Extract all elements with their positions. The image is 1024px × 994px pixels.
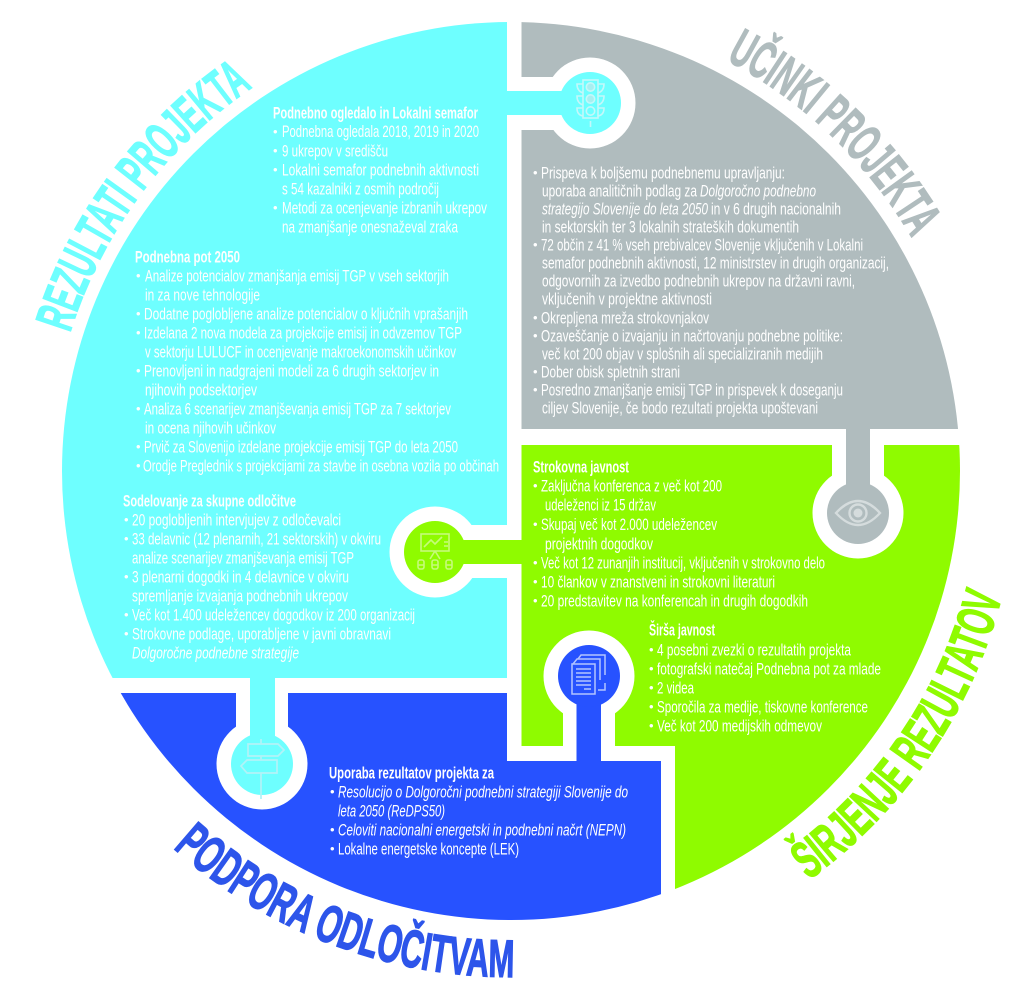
- text block: Širša javnost: Sporočila za medije, tiskovne konference: [657, 698, 868, 716]
- connector: traffic light badge: [507, 58, 636, 148]
- text block: Strokovna javnost: Skupaj več kot 2.000 udeležencev: [541, 515, 717, 534]
- text block: Podnebna pot 2050: v sektorju LULUCF in ocenjevanje makroekonomskih učinkov: [145, 342, 456, 362]
- icon: eye: [836, 501, 880, 525]
- icon: stacked documents: [572, 655, 605, 694]
- text block: učinki projekta list: 72 občin z 41 % vseh prebivalcev Slovenije vključenih v Lokalni: [541, 236, 863, 254]
- text block: učinki projekta list: in sektorskih ter 3 lokalnih strateških dokumentih: [542, 218, 799, 236]
- text block: Širša javnost: •: [649, 718, 654, 733]
- text block: Podnebna pot 2050: njihovih podsektorjev: [145, 380, 257, 400]
- panel: širjenje rezultatov (green quadrant): [522, 445, 964, 924]
- text block: Podnebna pot 2050: [135, 248, 499, 476]
- text block: Sodelovanje za skupne odločitve: Več kot 1.400 udeležencev dogodkov iz 200 organizacij: [132, 606, 415, 624]
- text block: Sodelovanje za skupne odločitve: •: [124, 569, 129, 584]
- text block: Podnebno ogledalo in Lokalni semafor: •: [273, 162, 278, 177]
- text block: Strokovna javnost: Strokovna javnost: [533, 458, 629, 476]
- text block: Sodelovanje za skupne odločitve: •: [124, 626, 129, 641]
- connector: presentation badge: [390, 506, 522, 598]
- text block: učinki projekta list: uporaba analitičnih podlag za: [542, 182, 697, 200]
- text block: Uporaba rezultatov projekta: Uporaba rezultatov projekta za: [329, 764, 494, 782]
- text block: Podnebna pot 2050: •: [136, 439, 141, 454]
- text block: Podnebno ogledalo in Lokalni semafor: s 54 kazalniki z osmih področij: [282, 180, 439, 198]
- text block: Podnebna pot 2050: Prvič za Slovenijo izdelane projekcije emisij TGP do leta 2050: [144, 438, 458, 456]
- text block: učinki projekta list: •: [533, 382, 538, 397]
- text block: učinki projekta list: odgovornih za izvedbo podnebnih ukrepov na državni ravni,: [542, 272, 855, 290]
- text block: učinki projekta list: •: [533, 310, 538, 325]
- text block: Sodelovanje za skupne odločitve: [123, 492, 415, 662]
- text block: Sodelovanje za skupne odločitve: analize scenarijev zmanjševanja emisij TGP: [132, 548, 354, 568]
- text block: Sodelovanje za skupne odločitve: Strokovne podlage, uporabljene v javni obravnavi: [132, 624, 391, 644]
- text block: učinki projekta list: več kot 200 objav v splošnih ali specializiranih medijih: [542, 344, 823, 364]
- text block: Sodelovanje za skupne odločitve: Sodelovanje za skupne odločitve: [123, 492, 296, 510]
- text block: učinki projekta list: strategijo Slovenije do leta 2050: [542, 200, 708, 218]
- text block: Podnebna pot 2050: in za nove tehnologije: [145, 286, 260, 304]
- text block: Podnebna pot 2050: •: [136, 458, 141, 473]
- text block: Podnebno ogledalo in Lokalni semafor: Lokalni semafor podnebnih aktivnosti: [282, 160, 479, 180]
- text block: učinki projekta list: vključenih v projektne aktivnosti: [542, 290, 712, 308]
- text block: Uporaba rezultatov projekta: •: [330, 784, 335, 799]
- panel: podpora odločitvam (blue quadrant): [120, 693, 661, 920]
- text block: Strokovna javnost: •: [533, 478, 538, 493]
- text block: Širša javnost: [649, 620, 881, 736]
- text block: Podnebna pot 2050: •: [136, 325, 141, 340]
- text block: učinki projekta list: Ozaveščanje o izvajanju in načrtovanju podnebne politike:: [541, 326, 843, 346]
- text block: Podnebna pot 2050: Prenovljeni in nadgrajeni modeli za 6 drugih sektorjev in: [144, 362, 439, 380]
- text block: učinki projekta list: •: [533, 328, 538, 343]
- text block: Strokovna javnost: •: [533, 516, 538, 532]
- text block: Uporaba rezultatov projekta: •: [330, 841, 335, 856]
- text block: Podnebna pot 2050: Dodatne poglobljene analize potencialov o ključnih vprašanjih: [144, 304, 468, 324]
- text block: učinki projekta list: in v 6 drugih nacionalnih: [711, 200, 841, 218]
- connector: documents badge: [544, 630, 634, 761]
- panel: rezultati projekta (cyan quadrant): [60, 20, 507, 678]
- text block: Podnebno ogledalo in Lokalni semafor: •: [273, 143, 278, 158]
- title: Rezultati projekta: REZULTATI PROJEKTA: [35, 61, 253, 332]
- icon: presentation board with audience: [418, 534, 452, 569]
- text block: učinki projekta list: semafor podnebnih aktivnosti, 12 ministrstev in drugih organizacij,: [542, 254, 889, 272]
- text block: Strokovna javnost: 10 člankov v znanstveni in strokovni literaturi: [541, 572, 775, 592]
- text block: Podnebna pot 2050: Izdelana 2 nova modela za projekcije emisij in odvzemov TGP: [144, 324, 462, 342]
- text block: Strokovna javnost: 20 predstavitev na konferencah in drugih dogodkih: [541, 592, 808, 610]
- connector: signpost badge: [216, 678, 308, 810]
- connector: eye badge: [812, 429, 904, 558]
- text block: Uporaba rezultatov projekta: Celoviti nacionalni energetski in podnebni načrt (NEPN): [338, 820, 626, 840]
- text block: Širša javnost: •: [649, 642, 654, 657]
- text block: učinki projekta list: •: [533, 237, 538, 252]
- text block: Sodelovanje za skupne odločitve: Dolgoročne podnebne strategije: [132, 644, 299, 662]
- text block: Širša javnost: Širša javnost: [649, 620, 715, 640]
- text block: Strokovna javnost: •: [533, 574, 538, 589]
- title: Podpora odločitvam: PODPORA ODLOČITVAM: [174, 821, 514, 978]
- text block: Uporaba rezultatov projekta: leta 2050 (ReDPS50): [338, 802, 445, 820]
- text block: Uporaba rezultatov projekta: [329, 764, 628, 858]
- text block: Uporaba rezultatov projekta: Resolucijo o Dolgoročni podnebni strategiji Slovenije do: [338, 782, 628, 802]
- text block: Podnebna pot 2050: •: [136, 363, 141, 378]
- icon: signpost: [241, 739, 284, 799]
- icon: traffic light: [577, 80, 604, 127]
- text block: Podnebno ogledalo in Lokalni semafor: •: [273, 124, 278, 139]
- text block: Podnebno ogledalo in Lokalni semafor: Podnebno ogledalo in Lokalni semafor: [273, 104, 478, 122]
- text block: Širša javnost: •: [649, 661, 654, 676]
- text block: učinki projekta list: Dolgoročno podnebno: [700, 182, 816, 200]
- text block: Podnebna pot 2050: Orodje Preglednik s projekcijami za stavbe in osebna vozila po občinah: [143, 456, 499, 476]
- text block: Podnebno ogledalo in Lokalni semafor: Podnebna ogledala 2018, 2019 in 2020: [282, 122, 479, 141]
- text block: učinki projekta list: ciljev Slovenije, če bodo rezultati projekta upoštevani: [542, 398, 818, 418]
- text block: Sodelovanje za skupne odločitve: •: [124, 607, 129, 622]
- text block: Podnebno ogledalo in Lokalni semafor: [273, 104, 487, 236]
- text block: Podnebna pot 2050: •: [136, 306, 141, 321]
- text block: Podnebno ogledalo in Lokalni semafor: 9 ukrepov v središču: [282, 142, 388, 160]
- text block: Podnebno ogledalo in Lokalni semafor: Metodi za ocenjevanje izbranih ukrepov: [282, 198, 487, 218]
- text block: Podnebna pot 2050: Analiza 6 scenarijev zmanjševanja emisij TGP za 7 sektorjev: [144, 400, 451, 418]
- text block: Strokovna javnost: projektnih dogodkov: [545, 534, 653, 554]
- title: Učinki projekta: UČINKI PROJEKTA: [730, 28, 940, 238]
- text block: Sodelovanje za skupne odločitve: 3 plenarni dogodki in 4 delavnice v okviru: [132, 568, 349, 586]
- text block: Sodelovanje za skupne odločitve: 20 poglobljenih intervjujev z odločevalci: [132, 510, 341, 530]
- text block: Podnebno ogledalo in Lokalni semafor: •: [273, 200, 278, 215]
- text block: učinki projekta list: Prispeva k boljšemu podnebnemu upravljanju:: [541, 164, 785, 182]
- panel: učinki projekta (grey quadrant): [522, 20, 964, 429]
- text block: učinki projekta list: Okrepljena mreža strokovnjakov: [541, 308, 709, 328]
- text block: Širša javnost: •: [649, 699, 654, 714]
- text block: Strokovna javnost: •: [533, 593, 538, 608]
- text block: Sodelovanje za skupne odločitve: •: [124, 531, 129, 546]
- text block: Širša javnost: 2 videa: [657, 678, 694, 698]
- text block: Podnebna pot 2050: Podnebna pot 2050: [135, 248, 240, 266]
- text block: Podnebna pot 2050: •: [136, 268, 141, 283]
- text block: Podnebna pot 2050: in ocena njihovih učinkov: [145, 418, 276, 438]
- text block: Širša javnost: •: [649, 680, 654, 695]
- text block: učinki projekta list: [533, 164, 889, 418]
- text block: Širša javnost: fotografski natečaj Podnebna pot za mlade: [657, 660, 881, 678]
- text block: Strokovna javnost: udeleženci iz 15 držav: [545, 496, 656, 514]
- text block: Sodelovanje za skupne odločitve: •: [124, 512, 129, 527]
- text block: Sodelovanje za skupne odločitve: 33 delavnic (12 plenarnih, 21 sektorskih) v okviru: [132, 530, 381, 548]
- text block: Strokovna javnost: [533, 458, 825, 610]
- text block: učinki projekta list: •: [533, 165, 538, 180]
- text block: Širša javnost: 4 posebni zvezki o rezultatih projekta: [657, 640, 851, 660]
- text block: učinki projekta list: Dober obisk spletnih strani: [541, 362, 680, 382]
- text block: Strokovna javnost: Zaključna konferenca z več kot 200: [541, 476, 722, 496]
- text block: Uporaba rezultatov projekta: •: [330, 822, 335, 837]
- text block: Uporaba rezultatov projekta: Lokalne energetske koncepte (LEK): [338, 840, 519, 858]
- text block: Strokovna javnost: •: [533, 555, 538, 570]
- title: Širjenje rezultatov: ŠIRJENJE REZULTATOV: [784, 586, 1001, 877]
- text block: Podnebna pot 2050: •: [136, 401, 141, 416]
- text block: Podnebno ogledalo in Lokalni semafor: na zmanjšanje onesnaževal zraka: [282, 218, 458, 236]
- text block: učinki projekta list: •: [533, 364, 538, 379]
- text block: Strokovna javnost: Več kot 12 zunanjih institucij, vključenih v strokovno delo: [541, 554, 825, 572]
- text block: učinki projekta list: Posredno zmanjšanje emisij TGP in prispevek k doseganju: [541, 380, 843, 400]
- text block: Sodelovanje za skupne odločitve: spremljanje izvajanja podnebnih ukrepov: [132, 586, 348, 606]
- text block: Podnebna pot 2050: Analize potencialov zmanjšanja emisij TGP v vseh sektorjih: [145, 266, 449, 286]
- text block: Širša javnost: Več kot 200 medijskih odmevov: [657, 716, 822, 736]
